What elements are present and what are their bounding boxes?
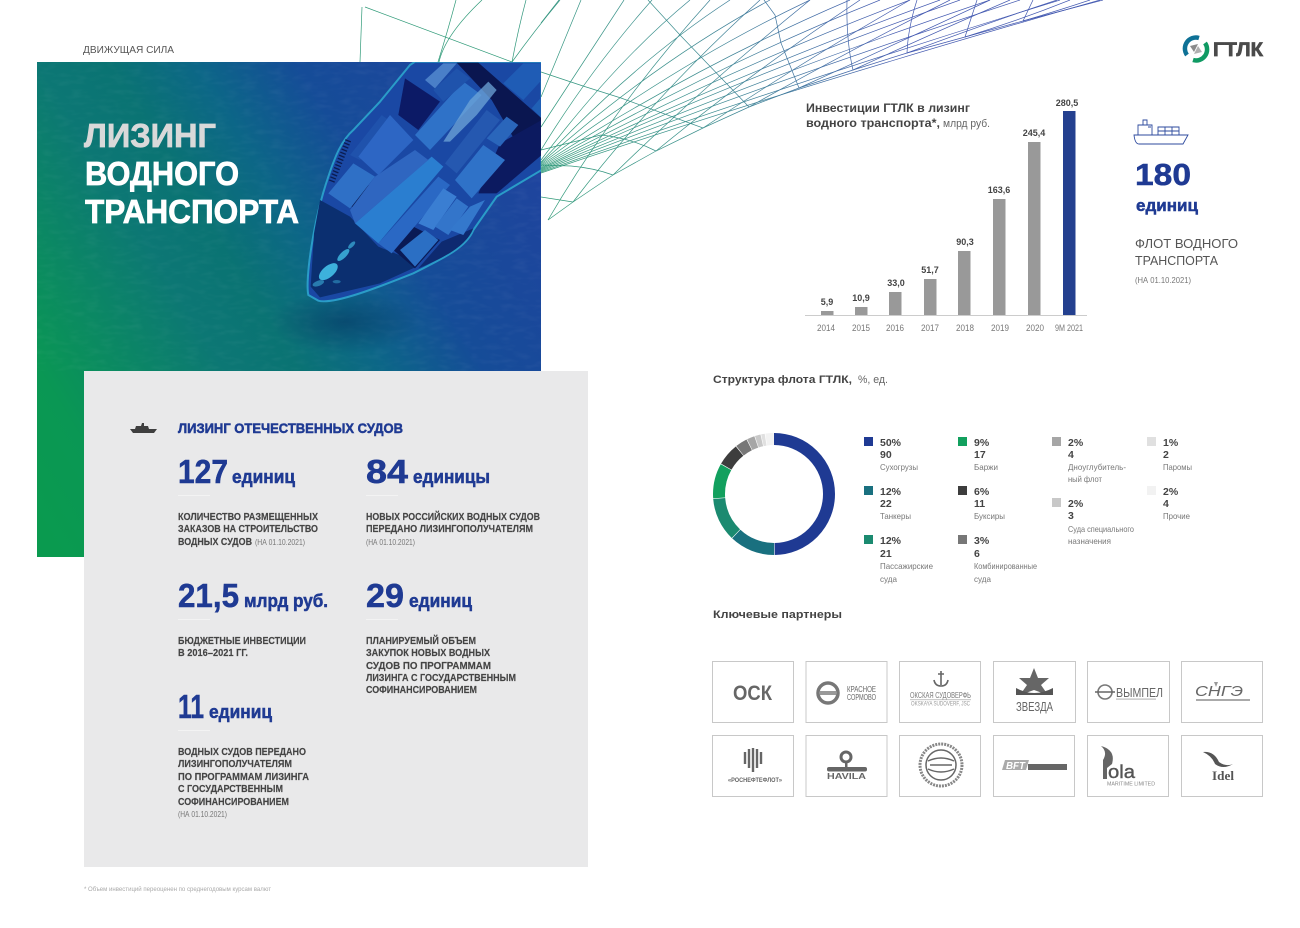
stat: 29 units: ПЛАНИРУЕМЫЙ ОБЪЕМ [366, 634, 476, 647]
bar 2016: 33,0 [887, 278, 905, 288]
logo: BFT [994, 736, 1074, 796]
legend: combined vessels: 6 [974, 548, 980, 560]
legend: special purpose vessels: 2% [1068, 498, 1084, 510]
stat: 84 units: (НА 01.10.2021) [366, 538, 415, 547]
bar 2018 [956, 237, 974, 333]
stat: 21.5 bn rubles: В 2016–2021 ГГ. [178, 648, 248, 659]
stat: 11 units: ПО ПРОГРАММАМ ЛИЗИНГА [178, 772, 309, 783]
stat: 21.5 bn rubles: БЮДЖЕТНЫЕ ИНВЕСТИЦИИ [178, 636, 306, 647]
stat: 11 units [178, 688, 309, 819]
background wire mesh [360, 0, 1103, 220]
partners heading: Ключевые партнеры [713, 609, 842, 621]
ship drawn over the photo area [308, 62, 542, 301]
fleet structure heading: %, ед. [858, 374, 888, 386]
stat: fleet 180 units [1135, 157, 1238, 285]
stat: 29 units: единиц [409, 591, 472, 611]
containers [350, 116, 386, 160]
legend: passenger vessels [864, 535, 933, 584]
stat: 127 units: ВОДНЫХ СУДОВ [178, 537, 252, 548]
stat: 11 units: ВОДНЫХ СУДОВ ПЕРЕДАНО [178, 747, 306, 758]
stat: 84 units: ПЕРЕДАНО ЛИЗИНГОПОЛУЧАТЕЛЯМ [366, 524, 533, 535]
stat: 127 units: (НА 01.10.2021) [255, 538, 305, 547]
deck crane [443, 82, 497, 142]
bar chart: investments [805, 98, 1087, 333]
logo: Rosnefteflot [712, 736, 794, 796]
logo: Oka shipyard: ОКСКАЯ СУДОВЕРФЬ [910, 691, 971, 700]
logo: Pola Maritime [1088, 736, 1168, 796]
bar 2014 [817, 297, 835, 333]
bar 2016: 2016 [886, 323, 904, 333]
bar 2017 [921, 265, 939, 333]
bar 2017: 2017 [921, 323, 939, 333]
ship hull [308, 62, 542, 301]
logo: Zvezda [994, 662, 1076, 722]
stat: 29 units: 29 [366, 577, 404, 614]
logo: Pola Maritime: ola [1108, 762, 1136, 782]
donut chart: fleet structure [719, 439, 829, 549]
bar 9M 2021 [1055, 98, 1083, 333]
hero title: ЛИЗИНГ [84, 117, 216, 154]
bar 9M 2021: 280,5 [1056, 98, 1078, 108]
legend: special purpose vessels: Суда специального [1068, 524, 1134, 534]
stat: 21.5 bn rubles [178, 577, 328, 659]
bar 2016 [886, 278, 905, 333]
logo: GTLK [1185, 38, 1263, 61]
stat: 29 units: ЛИЗИНГА С ГОСУДАРСТВЕННЫМ [366, 673, 516, 684]
legend: passenger vessels: 21 [880, 548, 892, 560]
legend: combined vessels: 3% [974, 535, 990, 547]
legend: tugs: 6% [974, 486, 990, 498]
stat: 21.5 bn rubles: млрд руб. [244, 591, 328, 611]
legend: dredging fleet: Дноуглубитель- [1068, 462, 1126, 472]
legend: others: 4 [1163, 498, 1169, 510]
stat: 21.5 bn rubles: 21,5 [178, 577, 239, 614]
legend: dredging fleet: ный флот [1068, 474, 1102, 484]
logo: Rosmorrechflot [900, 736, 980, 796]
logo: Pola Maritime: MARITIME LIMITED [1107, 782, 1155, 788]
legend: combined vessels: Комбинированные [974, 561, 1037, 571]
stat: 11 units: (НА 01.10.2021) [178, 810, 227, 819]
logo: Vympel [1088, 662, 1170, 722]
legend: special purpose vessels: назначения [1068, 536, 1111, 546]
logo: Krasnoe Sormovo [806, 662, 887, 722]
stat: 127 units: единиц [232, 467, 295, 487]
stat: fleet 180 units: ФЛОТ ВОДНОГО [1135, 236, 1238, 251]
stat: fleet 180 units: 180 [1135, 157, 1191, 192]
stat: 11 units: СОФИНАНСИРОВАНИЕМ [178, 797, 289, 808]
fleet structure heading: Структура флота ГТЛК, [713, 374, 852, 386]
logo: Krasnoe Sormovo: КРАСНОЕ [847, 685, 876, 694]
bar 2014: 2014 [817, 323, 835, 333]
logo: OSK: ОСК [733, 682, 772, 705]
logo: Zvezda: ЗВЕЗДА [1016, 700, 1054, 714]
logo: Havila [806, 736, 887, 796]
stat: 11 units: единиц [209, 702, 272, 722]
legend: dry cargo: 50% [880, 437, 902, 449]
legend: dry cargo [864, 437, 918, 472]
hero title [84, 117, 299, 230]
stat: fleet 180 units: единиц [1136, 196, 1199, 215]
donut legend [864, 437, 1192, 584]
stat: 11 units: С ГОСУДАРСТВЕННЫМ [178, 784, 283, 795]
stat: 127 units: 127 [178, 453, 228, 490]
hero title: ТРАНСПОРТА [85, 193, 299, 230]
bar 9M 2021: 9М 2021 [1055, 323, 1083, 333]
legend: tugs: Буксиры [974, 511, 1005, 521]
bar 2019 [988, 185, 1010, 333]
legend: combined vessels [958, 535, 1037, 584]
legend: special purpose vessels [1052, 498, 1134, 546]
legend: ferries: 2 [1163, 449, 1169, 461]
legend: others: 2% [1163, 486, 1179, 498]
stat: 29 units: СОФИНАНСИРОВАНИЕМ [366, 685, 477, 696]
legend: tankers [864, 486, 911, 521]
stat: 29 units: СУДОВ ПО ПРОГРАММАМ [366, 661, 491, 672]
bar 2015: 10,9 [852, 293, 870, 303]
bar 2015 [852, 293, 870, 333]
legend: passenger vessels: 12% [880, 535, 902, 547]
legend: dredging fleet: 4 [1068, 449, 1074, 461]
logo: SNGE: СНГЭ [1195, 683, 1243, 700]
chart title: млрд руб. [943, 118, 990, 130]
legend: dredging fleet: 2% [1068, 437, 1084, 449]
legend: barges: Баржи [974, 462, 998, 472]
legend: ferries: Паромы [1163, 462, 1192, 472]
stat: 127 units: КОЛИЧЕСТВО РАЗМЕЩЕННЫХ [178, 512, 318, 523]
icon: small ship [130, 423, 157, 433]
section label: ДВИЖУЩАЯ СИЛА [83, 44, 174, 56]
stat: fleet 180 units: (НА 01.10.2021) [1135, 275, 1191, 285]
bar 2018: 90,3 [956, 237, 974, 247]
legend: dry cargo: Сухогрузы [880, 462, 918, 472]
logo: BFT: BFT [1006, 761, 1026, 772]
stat: fleet 180 units: ТРАНСПОРТА [1135, 253, 1218, 268]
stat: 84 units: НОВЫХ РОССИЙСКИХ ВОДНЫХ СУДОВ [366, 510, 540, 523]
logo: Oka shipyard: OKSKAYA SUDOVERF, JSC [911, 702, 971, 708]
bar 2019: 2019 [991, 323, 1009, 333]
legend: barges [958, 437, 998, 472]
legend: tugs [958, 486, 1005, 521]
stat: 11 units: ЛИЗИНГОПОЛУЧАТЕЛЯМ [178, 759, 292, 770]
legend: tankers: 22 [880, 498, 892, 510]
bar 2020 [1023, 128, 1045, 333]
logo: Krasnoe Sormovo: СОРМОВО [847, 693, 876, 702]
legend: special purpose vessels: 3 [1068, 510, 1074, 522]
logo: Vympel: ВЫМПЕЛ [1116, 685, 1163, 700]
chart title [806, 103, 990, 130]
stat: 84 units [366, 453, 540, 547]
hero: ship photo panel with gradient [37, 62, 542, 557]
ship bow deck [311, 200, 417, 297]
footnote: * Объем инвестиций переоценен по среднегодовым курсам валют [84, 885, 271, 893]
stat: 84 units: 84 [366, 453, 409, 490]
legend: passenger vessels: суда [880, 574, 897, 584]
stat: 127 units: ЗАКАЗОВ НА СТРОИТЕЛЬСТВО [178, 524, 318, 535]
logo: Oka shipyard [900, 662, 980, 722]
bar 2019: 163,6 [988, 185, 1010, 195]
stat: 127 units [178, 453, 318, 548]
legend: dredging fleet [1052, 437, 1126, 484]
legend: tankers: 12% [880, 486, 902, 498]
stat: 29 units [366, 577, 516, 696]
legend: others: Прочие [1163, 511, 1190, 521]
stat: 11 units: 11 [178, 688, 204, 725]
dark hatches [398, 78, 440, 130]
partners logo grid [712, 662, 1262, 796]
legend: combined vessels: суда [974, 574, 991, 584]
legend: tugs: 11 [974, 498, 985, 510]
legend: ferries: 1% [1163, 437, 1179, 449]
hero title: ВОДНОГО [85, 155, 239, 192]
stat: 84 units: единицы [413, 467, 490, 487]
legend: dry cargo: 90 [880, 449, 892, 461]
bow foam [312, 240, 356, 288]
logo: OSK [712, 662, 794, 722]
bar 2015: 2015 [852, 323, 870, 333]
logo: Havila: HAVILA [827, 772, 866, 781]
legend: barges: 9% [974, 437, 990, 449]
logo: Idel: Idel [1212, 768, 1234, 783]
bar 2014: 5,9 [821, 297, 833, 307]
legend: tankers: Танкеры [880, 511, 911, 521]
legend: others [1147, 486, 1190, 521]
bar 2020: 2020 [1026, 323, 1044, 333]
panel: domestic vessels leasing [84, 371, 588, 867]
deck ladder [332, 140, 348, 182]
logo: GTLK: ГТЛК [1213, 40, 1263, 61]
chart title: водного транспорта*, [806, 118, 940, 130]
bar 2018: 2018 [956, 323, 974, 333]
bar 2020: 245,4 [1023, 128, 1045, 138]
legend: barges: 17 [974, 449, 986, 461]
logo: Rosnefteflot: «РОСНЕФТЕФЛОТ» [728, 777, 782, 784]
icon: cargo ship outline [1134, 120, 1188, 144]
legend: ferries [1147, 437, 1192, 472]
bar 2017: 51,7 [921, 265, 939, 275]
logo: SNGE [1182, 662, 1262, 722]
logo: Idel [1182, 736, 1262, 796]
chart title: Инвестиции ГТЛК в лизинг [806, 103, 970, 115]
stat: 29 units: ЗАКУПОК НОВЫХ ВОДНЫХ [366, 648, 490, 659]
panel heading: ЛИЗИНГ ОТЕЧЕСТВЕННЫХ СУДОВ [178, 421, 403, 436]
legend: passenger vessels: Пассажирские [880, 561, 933, 571]
